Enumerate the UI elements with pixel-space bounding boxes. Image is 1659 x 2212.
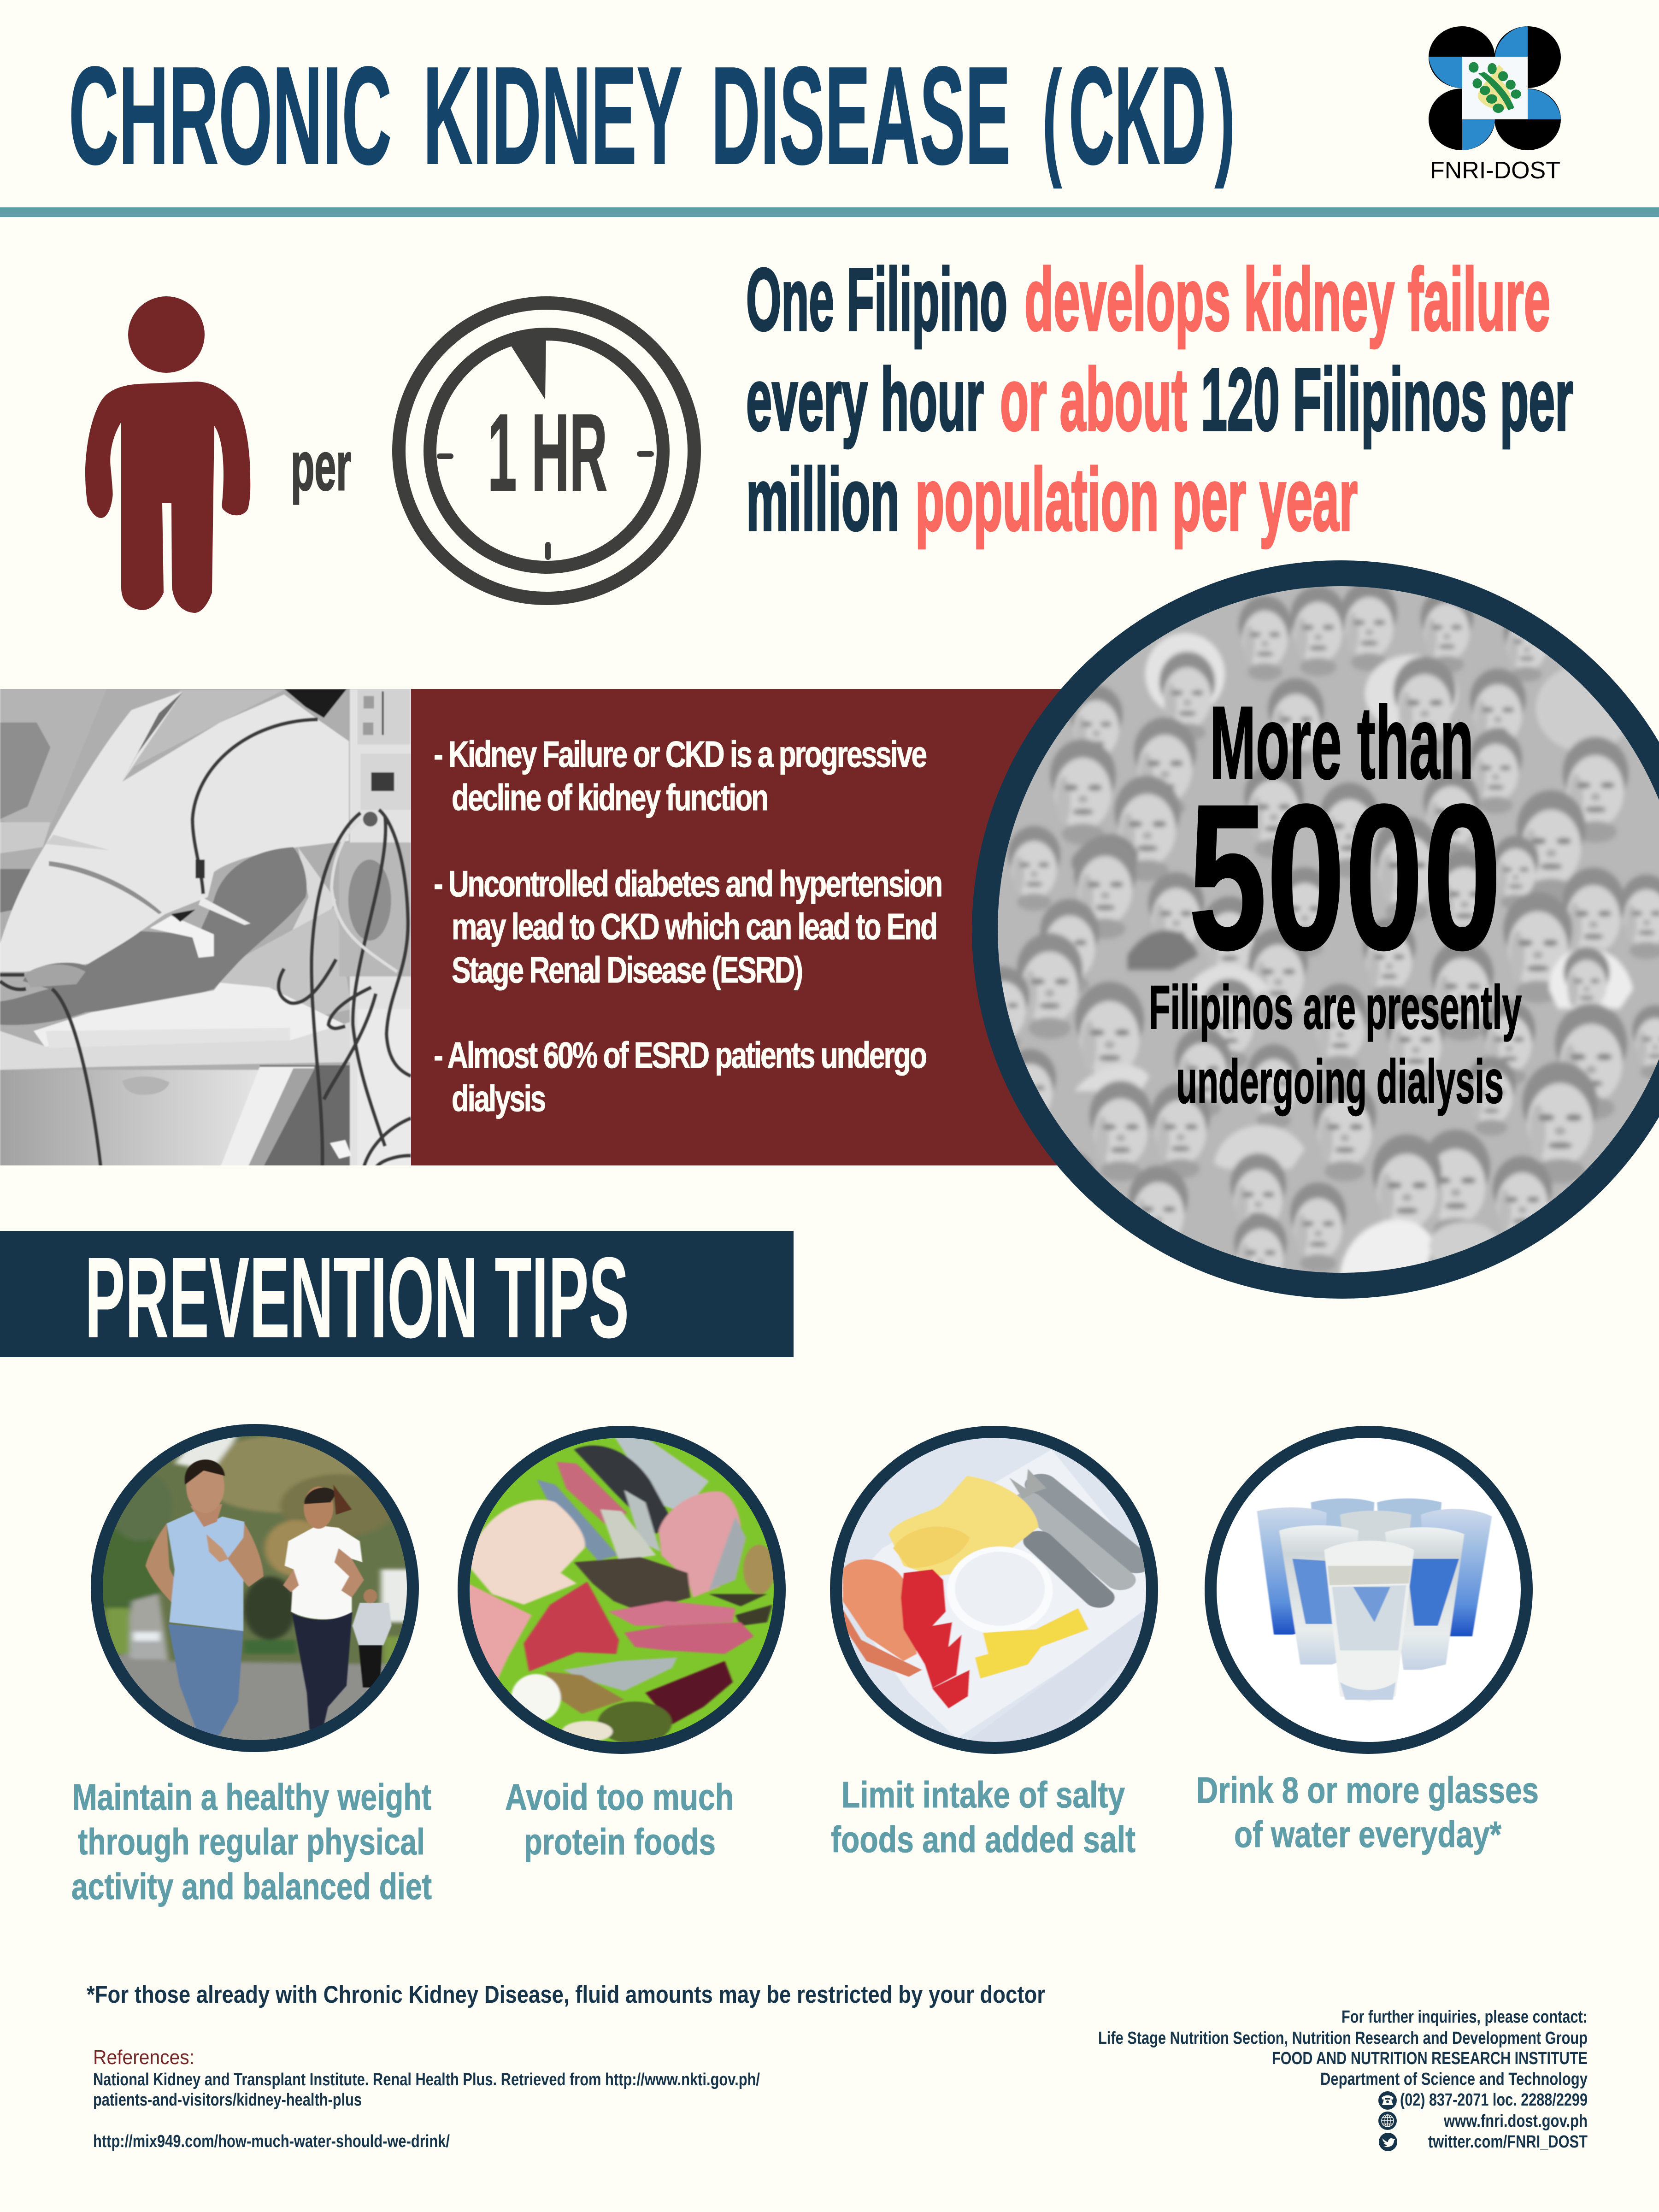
contact details: FOOD AND NUTRITION RESEARCH INSTITUTE — [1272, 2049, 1588, 2068]
label: per: per — [291, 427, 351, 505]
text block: CKD facts: Stage Renal Disease (ESRD) — [452, 949, 802, 990]
title: KIDNEY — [423, 38, 682, 193]
tip 1: exercise photo — [90, 1424, 419, 1756]
contact details: For further inquiries, please contact: — [1341, 2007, 1588, 2027]
icon: twitter bird — [1379, 2133, 1397, 2151]
text block: CKD facts — [434, 734, 941, 1119]
headline statistic: every hour — [746, 350, 984, 449]
title: CHRONIC — [69, 38, 392, 193]
tip 2 caption — [505, 1777, 734, 1862]
logo: FNRI-DOST — [1429, 26, 1561, 184]
title — [69, 38, 1235, 193]
headline statistic: million — [746, 450, 900, 549]
contact details — [1098, 2007, 1588, 2152]
text block: CKD facts: may lead to CKD which can lead to End — [452, 906, 936, 947]
tip 1 caption: activity and balanced diet — [71, 1866, 432, 1907]
tip 3 caption: Limit intake of salty — [841, 1774, 1125, 1815]
text block: CKD facts: decline of kidney function — [452, 777, 767, 818]
text block: CKD facts: - Kidney Failure or CKD is a progressive — [434, 734, 926, 775]
icon: person — [85, 296, 250, 613]
icon: clock 1 HR: 1 HR — [488, 392, 607, 514]
crowd circle ring — [985, 573, 1659, 1286]
headline statistic — [746, 250, 1573, 549]
references: http://mix949.com/how-much-water-should-we-drink/ — [93, 2132, 450, 2151]
photo: dialysis patient — [0, 682, 412, 1171]
title: DISEASE — [711, 38, 1011, 193]
references: References: — [93, 2046, 194, 2069]
logo: FNRI-DOST: FNRI-DOST — [1430, 157, 1560, 184]
text block: CKD facts: dialysis — [452, 1078, 545, 1119]
references — [93, 2046, 760, 2151]
header rule — [0, 207, 1659, 217]
tip 3 caption — [831, 1774, 1135, 1860]
icon: telephone — [1378, 2091, 1397, 2110]
icon: clock 1 HR — [399, 303, 694, 598]
tip 4 caption — [1196, 1770, 1539, 1855]
icon: globe — [1378, 2112, 1397, 2130]
headline statistic: One Filipino — [746, 250, 1007, 349]
references: National Kidney and Transplant Institute. Renal Health Plus. Retrieved from http://www.nkti.gov.ph/ — [93, 2070, 760, 2089]
text block: CKD facts: - Uncontrolled diabetes and hypertension — [434, 863, 941, 904]
headline statistic: or about — [1000, 350, 1187, 449]
tip 4 caption: of water everyday* — [1234, 1814, 1502, 1855]
contact details: www.fnri.dost.gov.ph — [1443, 2112, 1588, 2131]
tip 3 caption: foods and added salt — [831, 1819, 1135, 1860]
stat text: 5000 — [1188, 761, 1501, 992]
tip 1 caption — [71, 1777, 432, 1907]
contact details: twitter.com/FNRI_DOST — [1428, 2132, 1588, 2152]
tip 4 caption: Drink 8 or more glasses — [1196, 1770, 1539, 1811]
tip 2 caption: protein foods — [524, 1821, 716, 1862]
photo: crowd of faces — [998, 586, 1659, 1273]
tip 2: protein foods photo — [458, 1426, 786, 1754]
infographic: ) — [1215, 45, 1235, 189]
contact details: (02) 837-2071 loc. 2288/2299 — [1400, 2090, 1588, 2110]
text block: CKD facts: - Almost 60% of ESRD patients undergo — [434, 1035, 926, 1076]
title: ( — [1042, 45, 1062, 189]
tip 1 caption: through regular physical — [78, 1821, 425, 1862]
footnote: *For those already with Chronic Kidney Disease, fluid amounts may be restricted by your doctor — [87, 1981, 1045, 2008]
banner: prevention tips — [0, 1231, 794, 1362]
tip 3: salty foods photo — [830, 1426, 1159, 1754]
tip 4: water glasses photo — [1205, 1426, 1533, 1754]
stat text — [1149, 685, 1522, 1116]
contact details: Department of Science and Technology — [1320, 2070, 1588, 2089]
banner: prevention tips: PREVENTION TIPS — [85, 1233, 629, 1362]
references: patients-and-visitors/kidney-health-plus — [93, 2090, 362, 2110]
tip 2 caption: Avoid too much — [505, 1777, 734, 1818]
callout: crowd circle, more than 5000 — [972, 560, 1659, 1302]
panel: CKD facts — [411, 689, 1102, 1165]
title: CKD — [1069, 38, 1206, 193]
tip 1 caption: Maintain a healthy weight — [72, 1777, 431, 1818]
